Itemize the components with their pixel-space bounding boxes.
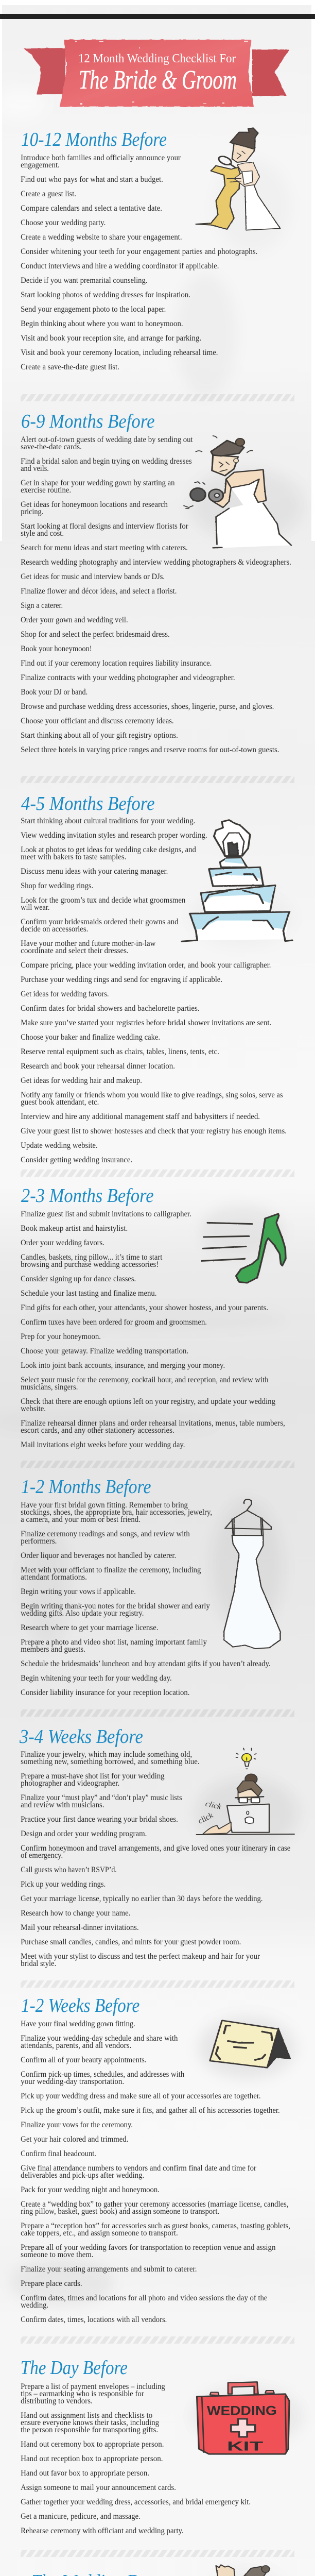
checklist text: Call guests who haven’t RSVP’d. (21, 1866, 117, 1874)
icon: tent place card (210, 2021, 290, 2067)
checklist text: website. (21, 1404, 46, 1413)
checklist text: tips – earmarking who is responsible for (21, 2389, 144, 2398)
checklist text: Confirm all of your beauty appointments. (21, 2056, 147, 2064)
checklist text: your wedding-day transportation. (21, 2077, 124, 2086)
checklist text: Confirm dates, times, locations with all vendors. (21, 2315, 167, 2324)
checklist text: Choose your baker and finalize wedding cake. (21, 1033, 160, 1042)
icon: wedding dress on hanger (224, 1499, 280, 1649)
checklist text: Compare calendars and select a tentative date. (21, 204, 162, 213)
checklist text (21, 1750, 290, 1968)
checklist text: Consider whitening your teeth for your engagement parties and photographs. (21, 247, 257, 256)
checklist text: Create a guest list. (21, 190, 76, 198)
checklist text (21, 1501, 271, 1697)
checklist text: Hand out reception box to appropriate person. (21, 2454, 163, 2463)
checklist text: exercise routine. (21, 486, 71, 495)
checklist text: Candles, baskets, ring pillow... it’s time to start (21, 1253, 163, 1262)
checklist text: Update wedding website. (21, 1141, 98, 1150)
checklist text: Select three hotels in varying price ranges and reserve rooms for out-of-town guests. (21, 745, 279, 754)
checklist text: Introduce both families and officially announce your (21, 154, 181, 162)
checklist text: Finalize your wedding-day schedule and share with (21, 2034, 178, 2043)
checklist text: Prepare a list of payment envelopes – including (21, 2382, 165, 2391)
checklist text: Design and order your wedding program. (21, 1829, 147, 1838)
checklist text (21, 435, 291, 754)
heading: 6-9 Months Before (21, 411, 155, 432)
checklist text: Select your music for the ceremony, cocktail hour, and reception, and review with (21, 1376, 269, 1384)
checklist text: Mail your rehearsal-dinner invitations. (21, 1923, 139, 1932)
checklist text: Send your engagement photo to the local paper. (21, 305, 166, 314)
checklist text: escort cards, and any other stationery accessories. (21, 1426, 174, 1435)
checklist text: Choose your officiant and discuss ceremony ideas. (21, 717, 174, 725)
top black bar (0, 14, 315, 19)
checklist text: View wedding invitation styles and research proper wording. (21, 831, 207, 840)
checklist text: Decide if you want premarital counseling. (21, 276, 148, 285)
checklist text: attendants, parents, and all vendors. (21, 2041, 131, 2050)
kit lettering: KIT (227, 2439, 264, 2453)
heading: 10-12 Months Before (21, 129, 167, 150)
checklist text: Visit and book your reception site, and arrange for parking. (21, 334, 201, 343)
checklist text: Start looking at floral designs and interview florists for (21, 522, 188, 531)
checklist text: Discuss menu ideas with your catering manager. (21, 867, 168, 876)
checklist text: Have your mother and future mother-in-law (21, 939, 156, 948)
checklist text: Finalize ceremony readings and songs, and review with (21, 1530, 190, 1538)
title line one: 12 Month Wedding Checklist For (78, 52, 236, 65)
checklist text (21, 1210, 285, 1449)
checklist text: Consider getting wedding insurance. (21, 1156, 132, 1164)
checklist text: save-the-date cards. (21, 443, 82, 451)
checklist text: Get in shape for your wedding gown by starting an (21, 479, 175, 487)
checklist text: will wear. (21, 903, 49, 912)
checklist text: Mail invitations eight weeks before your wedding day. (21, 1440, 185, 1449)
checklist text (21, 2020, 290, 2324)
heading: 2-3 Months Before (21, 1185, 154, 1207)
checklist text: Find gifts for each other, your attendants, your shower hostess, and your parents. (21, 1303, 268, 1312)
checklist text: Find out if your ceremony location requires liability insurance. (21, 659, 212, 668)
heading: The Day Before (21, 2357, 128, 2379)
checklist text: bridal style. (21, 1959, 56, 1968)
checklist text: Prep for your honeymoon. (21, 1332, 101, 1341)
checklist text: ring pillow, basket, guest book) and assign someone to transport. (21, 2207, 219, 2216)
checklist text: style and cost. (21, 529, 64, 538)
checklist text: Have your first bridal gown fitting. Remember to bring (21, 1501, 188, 1510)
checklist text: Create a wedding website to share your engagement. (21, 233, 182, 242)
ribbon left tail (24, 48, 65, 94)
checklist text: Purchase your wedding rings and send for engraving if applicable. (21, 975, 222, 984)
icon: bride lifting dumbbell (184, 436, 291, 548)
checklist text: Confirm your bridesmaids ordered their gowns and (21, 918, 179, 926)
checklist text: Notify any family or friends whom you would like to give readings, sing solos, serve as (21, 1091, 283, 1099)
checklist text: Finalize your jewelry, which may include something old, (21, 1750, 192, 1759)
checklist text: Meet with your stylist to discuss and test the perfect makeup and hair for your (21, 1952, 260, 1961)
ribbon centre (60, 40, 254, 107)
checklist text: Prepare a photo and video shot list, naming important family (21, 1638, 207, 1647)
checklist text: Research where to get your marriage license. (21, 1623, 159, 1632)
checklist text: Alert out-of-town guests of wedding date by sending out (21, 435, 194, 444)
section: 2-3 months before (21, 1185, 286, 1449)
checklist text: Finalize guest list and submit invitations to calligrapher. (21, 1210, 191, 1218)
checklist text: Get ideas for wedding favors. (21, 990, 109, 998)
checklist text: Find a bridal salon and begin trying on wedding dresses (21, 457, 192, 466)
heading: 1-2 Months Before (21, 1476, 151, 1498)
checklist text (21, 154, 257, 371)
checklist text: stockings, shoes, the appropriate bra, hair accessories, jewelry, (21, 1508, 212, 1517)
checklist text: Shop for and select the perfect bridesmaid dress. (21, 630, 170, 639)
checklist text: cake toppers, etc., and assign someone to transport. (21, 2229, 178, 2238)
checklist text: Finalize your “must play” and “don’t play” music lists (21, 1793, 182, 1802)
checklist text: Prepare all of your wedding favors for transportation to reception venue and assign (21, 2243, 276, 2252)
checklist text: Find out who pays for what and start a budget. (21, 175, 163, 184)
checklist text: Schedule the bridesmaids’ luncheon and buy attendant gifts if you haven’t already. (21, 1659, 271, 1668)
checklist text: Consider signing up for dance classes. (21, 1275, 136, 1283)
checklist text: decide on accessories. (21, 925, 88, 934)
checklist text: Begin writing your vows if applicable. (21, 1587, 136, 1596)
checklist text: Begin thinking about where you want to honeymoon. (21, 319, 183, 328)
checklist text: Purchase small candles, candies, and mints for your guest powder room. (21, 1938, 241, 1946)
checklist text: deliverables and pick-ups after wedding. (21, 2171, 144, 2180)
checklist text: Browse and purchase wedding dress accessories, shoes, lingerie, purse, and gloves. (21, 702, 274, 711)
checklist text: Finalize flower and décor ideas, and select a florist. (21, 587, 177, 596)
checklist text: Look into joint bank accounts, insurance, and merging your money. (21, 1361, 225, 1370)
checklist text: Start thinking about all of your gift registry options. (21, 731, 178, 740)
checklist text: Finalize rehearsal dinner plans and order rehearsal invitations, menus, table numbers, (21, 1419, 285, 1428)
checklist text: Give final attendance numbers to vendors and confirm final date and time for (21, 2164, 256, 2173)
checklist text: Confirm tuxes have been ordered for groom and groomsmen. (21, 1318, 207, 1327)
checklist text: Research wedding photography and interview wedding photographers & videographers. (21, 558, 291, 567)
checklist text: members and guests. (21, 1645, 85, 1654)
checklist text: Prepare a “reception box” for accessories such as guest books, cameras, toasting goblets, (21, 2222, 290, 2230)
checklist text: pricing. (21, 507, 43, 516)
checklist text: Prepare a must-have shot list for your wedding (21, 1772, 165, 1781)
section: 1-2 months before (21, 1476, 280, 1697)
checklist text: Create a save-the-date guest list. (21, 363, 119, 371)
banner paint specks (66, 41, 250, 105)
checklist text: Start thinking about cultural traditions for your wedding. (21, 817, 195, 825)
kit lettering (207, 2403, 277, 2453)
checklist text: Finalize contracts with your wedding photographer and videographer. (21, 673, 235, 682)
checklist text: coordinate and select their dresses. (21, 946, 129, 955)
checklist text: and veils. (21, 464, 49, 473)
checklist text: Practice your first dance wearing your bridal shoes. (21, 1815, 178, 1824)
checklist text: Order your wedding favors. (21, 1239, 104, 1247)
ribbon right tail (252, 49, 289, 96)
checklist text: Reserve rental equipment such as chairs, tables, linens, tents, etc. (21, 1047, 219, 1056)
label: click click: click (196, 1810, 215, 1825)
checklist text: attendant formations. (21, 1573, 87, 1582)
checklist text: someone to move them. (21, 2250, 94, 2259)
checklist text: Pick up your wedding dress and make sure all of your accessories are together. (21, 2092, 261, 2100)
checklist text: Confirm dates for bridal showers and bachelorette parties. (21, 1004, 200, 1013)
checklist text: Get your hair colored and trimmed. (21, 2135, 128, 2144)
label: click click: click (204, 1799, 223, 1811)
checklist text: distributing to vendors. (21, 2397, 93, 2405)
section: 10-12 months before (21, 128, 280, 371)
icon: green music note (202, 1214, 286, 1283)
checklist text: wedding. (21, 2301, 48, 2310)
checklist text: Conduct interviews and hire a wedding coordinator if applicable. (21, 262, 219, 270)
checklist text: of emergency. (21, 1851, 63, 1860)
checklist text: Sign a caterer. (21, 601, 63, 610)
checklist text: Pack for your wedding night and honeymoon. (21, 2185, 160, 2194)
heading: 1-2 Weeks Before (21, 1995, 139, 2016)
section: 3-4 weeks before (19, 1726, 294, 1968)
checklist text: Shop for wedding rings. (21, 882, 93, 890)
checklist text: Begin writing thank-you notes for the bridal shower and early (21, 1602, 210, 1611)
checklist text: Confirm honeymoon and travel arrangements, and give loved ones your itinerary in case (21, 1844, 290, 1853)
checklist text: Get a manicure, pedicure, and massage. (21, 2512, 141, 2521)
checklist text: Research how to change your name. (21, 1909, 130, 1918)
title line two: The Bride & Groom (79, 65, 237, 95)
checklist text: Hand out favor box to appropriate person. (21, 2469, 149, 2478)
checklist text: Visit and book your ceremony location, including rehearsal time. (21, 348, 218, 357)
checklist text: ensure everyone knows their tasks, including (21, 2418, 159, 2427)
section: 4-5 months before (21, 793, 292, 1164)
section: 6-9 months before (21, 411, 291, 754)
checklist text: Rehearse ceremony with officiant and wedding party. (21, 2527, 184, 2535)
checklist text: photographer and videographer. (21, 1779, 119, 1788)
checklist text: Book makeup artist and hairstylist. (21, 1224, 128, 1233)
checklist text: Create a “wedding box” to gather your ceremony accessories (marriage license, candles, (21, 2200, 289, 2209)
checklist text: Order liquor and beverages not handled by caterer. (21, 1551, 176, 1560)
checklist text: Get ideas for music and interview bands or DJs. (21, 572, 165, 581)
checklist text: Get ideas for wedding hair and makeup. (21, 1076, 142, 1085)
heading: 4-5 Months Before (21, 793, 155, 815)
checklist text: Consider liability insurance for your reception location. (21, 1688, 190, 1697)
icon: tiered wedding cake (182, 820, 292, 941)
checklist text: Choose your getaway. Finalize wedding transportation. (21, 1347, 188, 1355)
checklist text: Start looking photos of wedding dresses for inspiration. (21, 291, 190, 299)
checklist text: Meet with your officiant to finalize the ceremony, including (21, 1566, 201, 1574)
checklist text: Make sure you’ve started your registries before bridal shower invitations are sent. (21, 1019, 271, 1027)
checklist text: Finalize your vows for the ceremony. (21, 2121, 133, 2129)
checklist text: Look at photos to get ideas for wedding cake designs, and (21, 845, 196, 854)
checklist text (21, 817, 287, 1164)
checklist text: Confirm pick-up times, schedules, and addresses with (21, 2070, 184, 2079)
checklist text: Confirm dates, times and locations for all photo and video sessions the day of the (21, 2294, 267, 2302)
checklist text: Finalize your seating arrangements and submit to caterer. (21, 2265, 197, 2274)
icon: bride and groom (216, 2565, 283, 2576)
checklist text: guest book attendant, etc. (21, 1098, 99, 1107)
checklist text: Search for menu ideas and start meeting with caterers. (21, 544, 188, 552)
checklist text: Hand out ceremony box to appropriate person. (21, 2440, 164, 2449)
checklist text: Have your final wedding gown fitting. (21, 2020, 135, 2028)
checklist text: Pick up your wedding rings. (21, 1880, 106, 1889)
checklist text: Give your guest list to shower hostesses and check that your registry has enough items. (21, 1127, 287, 1136)
checklist text: browsing and purchase wedding accessories! (21, 1260, 159, 1269)
icon: bride reading long list (196, 128, 280, 230)
checklist text: Gather together your wedding dress, accessories, and bridal emergency kit. (21, 2498, 251, 2506)
checklist text: performers. (21, 1537, 57, 1546)
kit lettering: WEDDING (207, 2403, 277, 2418)
checklist text: Get your marriage license, typically no earlier than 30 days before the wedding. (21, 1894, 263, 1903)
section: the wedding day (31, 2565, 283, 2576)
checklist text: Assign someone to mail your announcement cards. (21, 2483, 176, 2492)
checklist text: musicians, singers. (21, 1383, 78, 1392)
checklist text: Book your honeymoon! (21, 645, 92, 653)
checklist text: something new, something borrowed, and something blue. (21, 1757, 200, 1766)
title banner (24, 40, 289, 107)
section: 1-2 weeks before (21, 1995, 290, 2324)
checklist text: Look for the groom’s tux and decide what groomsmen (21, 896, 185, 905)
checklist text: Begin whitening your teeth for your wedding day. (21, 1674, 172, 1683)
checklist text: Book your DJ or band. (21, 688, 87, 697)
checklist text: Order your gown and wedding veil. (21, 616, 128, 624)
checklist text: Research and book your rehearsal dinner location. (21, 1062, 175, 1071)
checklist text (21, 2382, 251, 2535)
checklist text: wedding gifts. Also update your registry. (21, 1609, 144, 1618)
checklist text: engagement. (21, 161, 60, 170)
checklist text: and review with musicians. (21, 1801, 104, 1809)
checklist text: Prepare place cards. (21, 2279, 82, 2288)
checklist text: Interview and hire any additional management staff and babysitters if needed. (21, 1112, 260, 1121)
checklist text: Confirm final headcount. (21, 2149, 96, 2158)
checklist text: the person responsible for transporting gifts. (21, 2426, 158, 2434)
icon: wedding kit case (197, 2382, 289, 2454)
checklist text: Check that there are enough options left on your registry, and update your wedding (21, 1397, 275, 1406)
heading: 3-4 Weeks Before (19, 1726, 143, 1748)
checklist text: Choose your wedding party. (21, 218, 106, 227)
checklist text: Schedule your last tasting and finalize menu. (21, 1289, 157, 1298)
checklist text: Compare pricing, place your wedding invitation order, and book your calligrapher. (21, 961, 271, 970)
checklist text: meet with bakers to taste samples. (21, 853, 127, 861)
checklist text: Get ideas for honeymoon locations and research (21, 500, 168, 509)
label: click click (196, 1799, 223, 1825)
checklist text: Hand out assignment lists and checklists to (21, 2411, 152, 2420)
section: the day before (21, 2357, 289, 2535)
checklist text: a camera, and your mom or best friend. (21, 1515, 141, 1524)
checklist text: Pick up the groom’s outfit, make sure it fits, and gather all of his accessories together. (21, 2106, 280, 2115)
icon: bride at laptop with light bulb (196, 1748, 294, 1835)
